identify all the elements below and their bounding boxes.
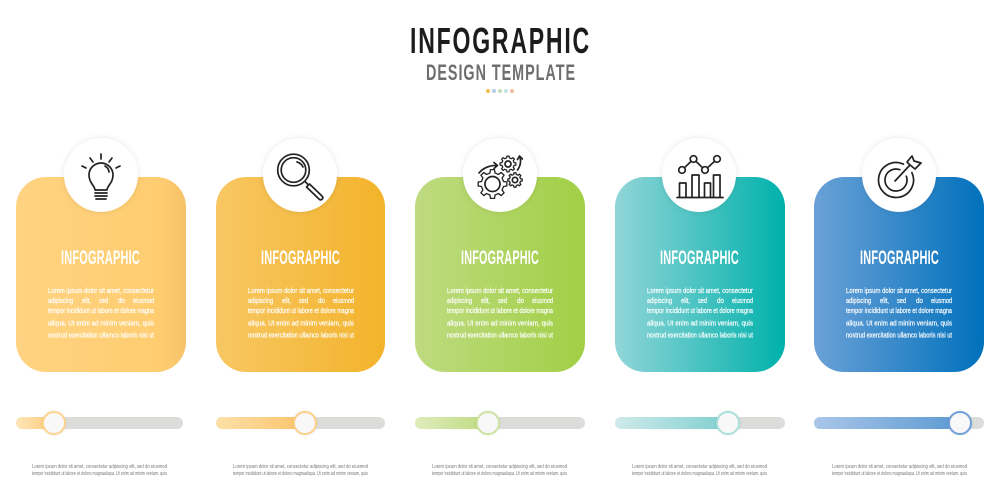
card 5 heading: INFOGRAPHIC xyxy=(860,248,939,269)
card 5 body text: nostrud exercitation ullamco laboris nisi ut xyxy=(846,330,952,340)
card 3 body text: tempor incididunt ut labore et dolore magna xyxy=(447,306,553,315)
caption 5 xyxy=(832,464,967,477)
card 5 body text: do xyxy=(916,296,923,305)
card 2 body text: nostrud exercitation ullamco laboris nisi ut xyxy=(248,330,354,340)
card 1 heading: INFOGRAPHIC xyxy=(61,248,140,269)
panel: card 3 xyxy=(415,177,585,372)
card 2 body text: sed xyxy=(299,296,308,305)
card 5 body text: adipiscing xyxy=(846,296,871,305)
card 1 body text xyxy=(48,286,154,340)
card 2 body text: tempor incididunt ut labore et dolore magna xyxy=(248,306,354,315)
card 3 body text: eiusmod xyxy=(532,296,553,305)
icon: gears xyxy=(463,138,537,212)
panel: card 1 xyxy=(16,177,186,372)
panel: card 4 xyxy=(615,177,785,372)
card 1 body text: do xyxy=(118,296,125,305)
card 2 body text: adipiscing xyxy=(248,296,273,305)
card 5 body text xyxy=(846,286,952,340)
card 4 body text: adipiscing xyxy=(647,296,672,305)
card 1 body text: tempor incididunt ut labore et dolore magna xyxy=(48,306,154,315)
icon: target with dart xyxy=(862,138,936,212)
card 1 body text: eiusmod xyxy=(133,296,154,305)
card 4 heading: INFOGRAPHIC xyxy=(660,248,739,269)
card 1 body text: aliqua. Ut enim ad minim veniam, quis xyxy=(48,318,154,328)
card 3 body text: nostrud exercitation ullamco laboris nisi ut xyxy=(447,330,553,340)
caption 4: tempor incididunt ut labore et dolore magnaaliqua. Ut enim ad minim veniam, quis xyxy=(632,471,767,477)
card 1 body text: elit, xyxy=(82,296,91,305)
caption 1: tempor incididunt ut labore et dolore magnaaliqua. Ut enim ad minim veniam, quis xyxy=(32,471,167,477)
card 4 body text xyxy=(647,286,753,340)
caption 2: tempor incididunt ut labore et dolore magnaaliqua. Ut enim ad minim veniam, quis xyxy=(233,471,368,477)
card 2 body text: do xyxy=(318,296,325,305)
caption 1 xyxy=(32,464,167,477)
card 5 body text: eiusmod xyxy=(931,296,952,305)
card 3 body text: adipiscing xyxy=(447,296,472,305)
card 2 body text: eiusmod xyxy=(333,296,354,305)
card 4 body text: elit, xyxy=(681,296,690,305)
card 4 body text: sed xyxy=(698,296,707,305)
slider 2 xyxy=(216,412,385,434)
card 2 body text: Lorem ipsum dolor sit amet, consectetur xyxy=(248,286,354,295)
card 4 body text: Lorem ipsum dolor sit amet, consectetur xyxy=(647,286,753,295)
card 3 body text: Lorem ipsum dolor sit amet, consectetur xyxy=(447,286,553,295)
card 3 body text: sed xyxy=(498,296,507,305)
card 1 body text: sed xyxy=(99,296,108,305)
slider 5 xyxy=(814,412,984,434)
caption 3 xyxy=(432,464,567,477)
card 3 heading: INFOGRAPHIC xyxy=(461,248,539,269)
card 4 body text: tempor incididunt ut labore et dolore magna xyxy=(647,306,753,315)
caption 3: tempor incididunt ut labore et dolore magnaaliqua. Ut enim ad minim veniam, quis xyxy=(432,471,567,477)
card 1 body text: Lorem ipsum dolor sit amet, consectetur xyxy=(48,286,154,295)
card 2 body text: aliqua. Ut enim ad minim veniam, quis xyxy=(248,318,354,328)
caption 1: Lorem ipsum dolor sit amet, consectetur adipiscing elit, sed do eiusmod xyxy=(32,464,167,470)
card 5 body text: elit, xyxy=(880,296,889,305)
card 3 body text xyxy=(447,286,553,340)
card 2 body text xyxy=(248,286,354,340)
slider 4 xyxy=(615,412,785,434)
card 1 body text: adipiscing xyxy=(48,296,73,305)
card 4 body text: aliqua. Ut enim ad minim veniam, quis xyxy=(647,318,753,328)
card 3 body text: elit, xyxy=(481,296,490,305)
card 5 body text: sed xyxy=(897,296,906,305)
slider 3 xyxy=(415,412,585,434)
caption 2 xyxy=(233,464,368,477)
card 5 body text: aliqua. Ut enim ad minim veniam, quis xyxy=(846,318,952,328)
decorative dots xyxy=(486,89,514,93)
card 4 body text: eiusmod xyxy=(732,296,753,305)
subtitle: DESIGN TEMPLATE xyxy=(426,60,576,85)
caption 4 xyxy=(632,464,767,477)
panel: card 2 xyxy=(216,177,385,372)
caption 4: Lorem ipsum dolor sit amet, consectetur adipiscing elit, sed do eiusmod xyxy=(632,464,767,470)
card 5 body text: tempor incididunt ut labore et dolore magna xyxy=(846,306,952,315)
icon: light bulb xyxy=(64,138,138,212)
caption 2: Lorem ipsum dolor sit amet, consectetur adipiscing elit, sed do eiusmod xyxy=(233,464,368,470)
caption 3: Lorem ipsum dolor sit amet, consectetur adipiscing elit, sed do eiusmod xyxy=(432,464,567,470)
card 1 body text: nostrud exercitation ullamco laboris nisi ut xyxy=(48,330,154,340)
icon: bar and line chart xyxy=(662,138,736,212)
icon: magnifying glass xyxy=(263,138,337,212)
slider 1 xyxy=(16,412,183,434)
title: INFOGRAPHIC xyxy=(410,20,591,61)
card 2 heading: INFOGRAPHIC xyxy=(261,248,340,269)
card 2 body text: elit, xyxy=(282,296,291,305)
card 3 body text: do xyxy=(517,296,524,305)
panel: card 5 xyxy=(814,177,984,372)
card 5 body text: Lorem ipsum dolor sit amet, consectetur xyxy=(846,286,952,295)
card 4 body text: nostrud exercitation ullamco laboris nisi ut xyxy=(647,330,753,340)
card 4 body text: do xyxy=(717,296,724,305)
caption 5: Lorem ipsum dolor sit amet, consectetur adipiscing elit, sed do eiusmod xyxy=(832,464,967,470)
card 3 body text: aliqua. Ut enim ad minim veniam, quis xyxy=(447,318,553,328)
